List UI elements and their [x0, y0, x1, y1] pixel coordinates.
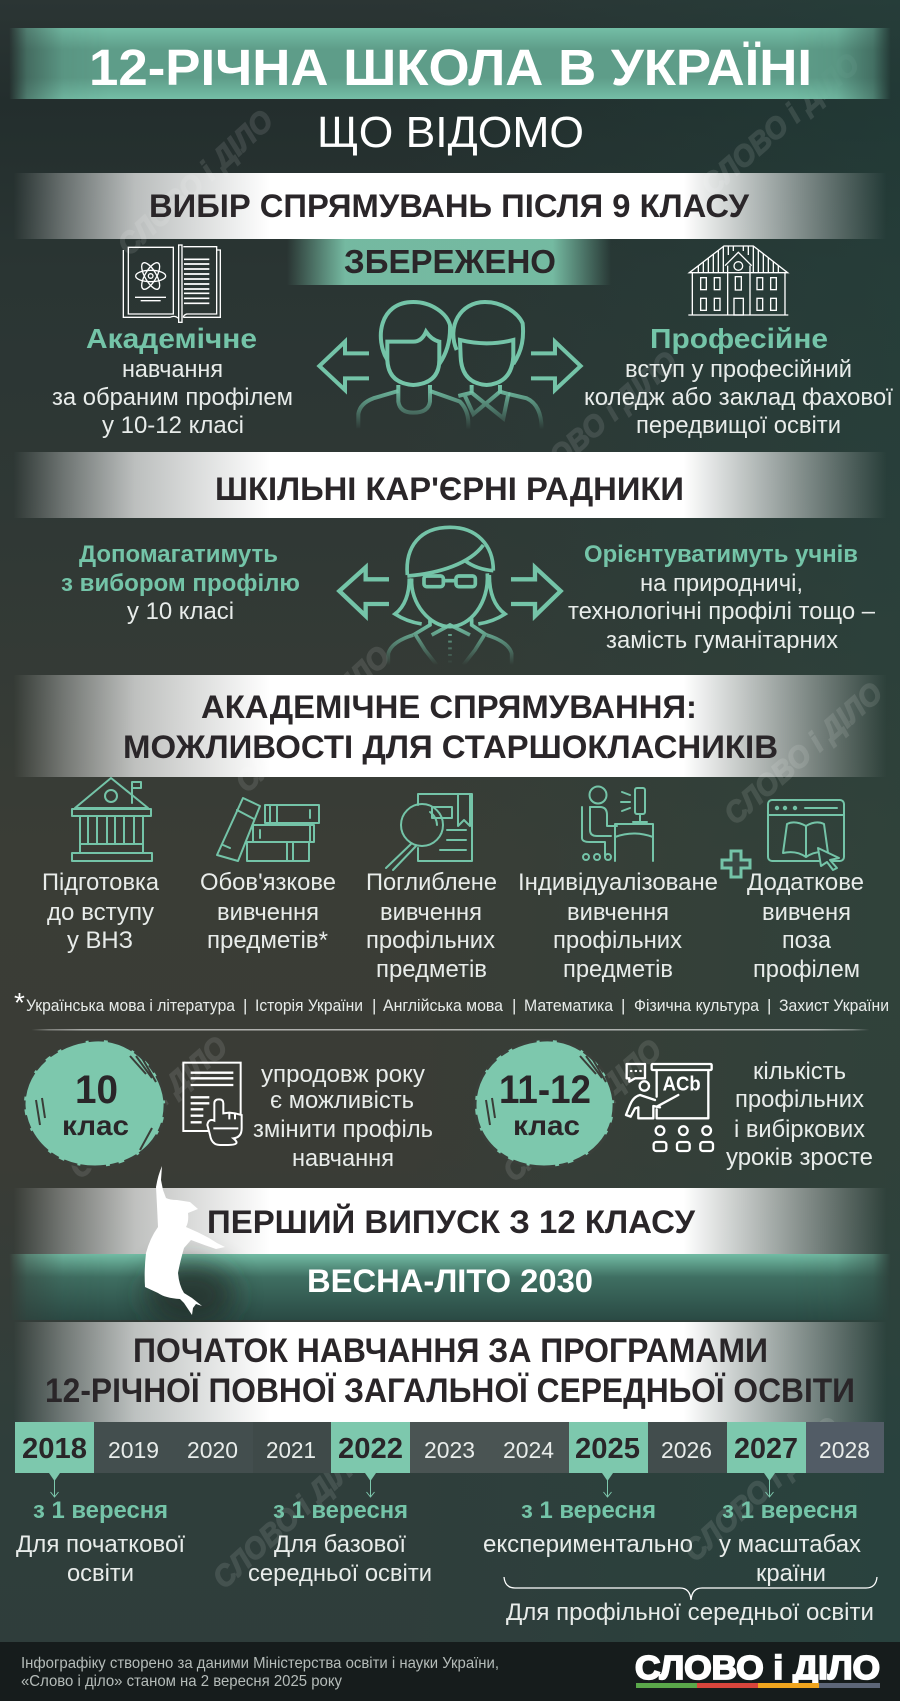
watermarks: СЛОВО і ДІЛО [207, 1438, 376, 1595]
opportunity: compulsory subjects: вивчення [217, 899, 319, 926]
milestone: experimental: з 1 вересня [521, 1497, 656, 1524]
watermarks: СЛОВО і ДІЛО [63, 1030, 234, 1185]
opportunity: extra study: поза [782, 927, 832, 954]
opportunity: university prep: у ВНЗ [67, 927, 133, 954]
subtitle: ЩО ВІДОМО [317, 108, 584, 157]
opportunity: individualised study: предметів [563, 956, 673, 983]
footnote: compulsory subjects list: Українська мова і література [26, 996, 235, 1015]
milestone: primary education [16, 1497, 185, 1587]
opportunity: individualised study: вивчення [567, 899, 669, 926]
timeline: 2019 [108, 1437, 159, 1463]
opportunity: compulsory subjects [200, 869, 336, 954]
icon: university building [72, 778, 152, 861]
icon: college building [688, 246, 788, 315]
logo: СЛОВО і ДІЛО [635, 1649, 880, 1686]
badge: grades 11-12: клас [513, 1110, 580, 1141]
text: adviser orientation: замість гуманітарних [606, 627, 838, 654]
milestone: basic secondary education: з 1 вересня [273, 1497, 408, 1524]
opportunity: in-depth study [366, 869, 497, 983]
opportunity: compulsory subjects: Обов'язкове [200, 869, 336, 896]
text: grade 10: упродовж року [261, 1061, 425, 1088]
section heading: academic direction opportunities [0, 675, 900, 777]
watermarks: СЛОВО і ДІЛО [718, 676, 889, 831]
timeline: 2021 [266, 1437, 316, 1463]
opportunity: individualised study [518, 869, 718, 983]
saved label [287, 239, 611, 285]
section heading: choice after grade 9 [0, 173, 900, 239]
brace [504, 1577, 877, 1600]
timeline: 2026 [661, 1437, 712, 1463]
section heading: first graduation: ПЕРШИЙ ВИПУСК З 12 КЛАСУ [207, 1204, 696, 1240]
opportunity: in-depth study: Поглиблене [366, 869, 497, 896]
date band: spring-summer 2030: ВЕСНА-ЛІТО 2030 [307, 1263, 593, 1299]
timeline: 2024 [503, 1437, 554, 1463]
panel: academic direction: Академічне [86, 323, 257, 354]
text: adviser help: у 10 класі [127, 598, 234, 625]
milestone: primary education: з 1 вересня [33, 1497, 168, 1524]
source note: Інфографіку створено за даними Міністерства освіти і науки України, [21, 1655, 499, 1672]
text: grade 10: змінити профіль [253, 1116, 433, 1143]
opportunity: university prep [42, 869, 160, 954]
opportunity: extra study: Додаткове [747, 869, 864, 896]
milestone: nationwide: з 1 вересня [722, 1497, 858, 1524]
timeline: 2020 [187, 1437, 238, 1463]
timeline [15, 1422, 884, 1473]
watermarks: СЛОВО і ДІЛО [497, 1033, 668, 1188]
text: grade 10: є можливість [270, 1087, 414, 1114]
milestone: nationwide: у масштабах [719, 1531, 861, 1558]
badge: grade 10 [24, 1040, 165, 1167]
footnote: compulsory subjects list: * [14, 987, 25, 1018]
text: grades 11-12 [726, 1058, 873, 1171]
section heading: academic direction opportunities: МОЖЛИВОСТІ ДЛЯ СТАРШОКЛАСНИКІВ [123, 729, 778, 765]
milestone: nationwide [719, 1497, 861, 1587]
milestone: experimental [483, 1497, 693, 1558]
milestone: primary education: освіти [67, 1560, 134, 1587]
timeline: 2018 [22, 1433, 87, 1465]
text: grades 11-12: і вибіркових [734, 1116, 865, 1143]
icon: online book in browser [768, 800, 844, 870]
section heading: career advisers: ШКІЛЬНІ КАР'ЄРНІ РАДНИКИ [215, 471, 684, 507]
milestone: primary education: Для початкової [16, 1531, 185, 1558]
footnote: compulsory subjects list: | [372, 996, 376, 1015]
footnote: compulsory subjects list: Математика [524, 996, 613, 1015]
watermarks: СЛОВО і ДІЛО [695, 47, 866, 202]
opportunity: extra study: вивченя [762, 899, 851, 926]
icon: magnifier over book [386, 794, 472, 870]
milestone: experimental: експериментально [483, 1531, 693, 1558]
opportunity: university prep: Підготовка [42, 869, 160, 896]
text: adviser orientation [568, 541, 876, 654]
text: adviser orientation: Орієнтуватимуть учнів [584, 541, 858, 568]
footnote: compulsory subjects list: Історія України [255, 996, 363, 1015]
footer [0, 1642, 900, 1701]
text: grades 11-12: профільних [735, 1086, 864, 1113]
text: adviser orientation: технологічні профілі тощо – [568, 598, 876, 625]
opportunity: individualised study: профільних [553, 927, 682, 954]
footnote: compulsory subjects list: | [243, 996, 247, 1015]
timeline: 2025 [575, 1433, 640, 1465]
saved label: ЗБЕРЕЖЕНО [344, 243, 556, 280]
milestone: nationwide: країни [756, 1560, 826, 1587]
text: profile secondary education: Для профільної середньої освіти [506, 1599, 874, 1626]
panel: professional direction: Професійне [650, 323, 828, 354]
opportunity: in-depth study: предметів [376, 956, 487, 983]
watermarks: СЛОВО і ДІЛО [111, 104, 280, 262]
opportunity: individualised study: Індивідуалізоване [518, 869, 718, 896]
opportunity: in-depth study: профільних [366, 927, 495, 954]
panel: professional direction: передвищої освіти [636, 412, 841, 439]
timeline: 2027 [734, 1433, 798, 1465]
icon: two students with arrows [319, 302, 581, 429]
footnote: compulsory subjects list: Англійська мова [383, 996, 504, 1015]
footnote: compulsory subjects list: | [512, 996, 516, 1015]
text: grade 10: навчання [292, 1145, 394, 1172]
text: grades 11-12: кількість [753, 1058, 846, 1085]
timeline: 2028 [819, 1437, 870, 1463]
panel: professional direction: коледж або заклад фахової [584, 384, 893, 411]
section heading: programme start: ПОЧАТОК НАВЧАННЯ ЗА ПРОГРАМАМИ [133, 1332, 768, 1370]
opportunity: extra study: профілем [753, 956, 860, 983]
icon: adviser with arrows [339, 527, 561, 665]
panel: professional direction [584, 323, 893, 439]
text: adviser help [61, 541, 300, 625]
icon: teacher at board: ACb [663, 1073, 701, 1096]
icon: student at desk [582, 786, 653, 861]
icon: plus [722, 851, 750, 877]
section heading: programme start [0, 1322, 900, 1422]
watermarks: СЛОВО і ДІЛО [678, 1411, 847, 1568]
section heading: first graduation [0, 1188, 900, 1254]
text: grade 10 [253, 1061, 433, 1172]
text: adviser orientation: на природничі, [640, 570, 803, 597]
section heading: academic direction opportunities: АКАДЕМІЧНЕ СПРЯМУВАННЯ: [201, 689, 697, 725]
watermarks: СЛОВО і ДІЛО [229, 640, 397, 799]
panel: academic direction: у 10-12 класі [102, 412, 244, 439]
watermarks: СЛОВО і ДІЛО [513, 345, 684, 500]
footnote: compulsory subjects list [14, 987, 889, 1018]
footnote: compulsory subjects list: Захист України [779, 996, 889, 1015]
icon: document and hand [183, 1063, 242, 1145]
badge: grade 10: 10 [75, 1068, 118, 1112]
milestone: basic secondary education: середньої освіти [248, 1560, 432, 1587]
footnote: compulsory subjects list: Фізична культура [634, 996, 759, 1015]
panel: academic direction: навчання [122, 356, 223, 383]
panel: academic direction [52, 323, 293, 439]
source note: «Слово і діло» станом на 2 вересня 2025 року [21, 1673, 342, 1690]
panel: academic direction: за обраним профілем [52, 384, 293, 411]
icon: teacher at board [626, 1064, 713, 1151]
badge: grades 11-12 [475, 1040, 614, 1167]
text: adviser help: Допомагатимуть [79, 541, 278, 568]
source note [21, 1655, 499, 1690]
text: grades 11-12: уроків зросте [726, 1144, 873, 1171]
section heading: career advisers [0, 452, 900, 518]
opportunity: extra study [747, 869, 864, 983]
icon: books [217, 798, 319, 861]
text: adviser help: з вибором профілю [61, 570, 300, 597]
section heading: programme start: 12-РІЧНОЇ ПОВНОЇ ЗАГАЛЬНОЇ СЕРЕДНЬОЇ ОСВІТИ [45, 1372, 855, 1410]
icon: jumping graduate [145, 1166, 225, 1315]
badge: grade 10: клас [62, 1110, 129, 1141]
panel: professional direction: вступ у професійний [625, 356, 852, 383]
footnote: compulsory subjects list: | [767, 996, 771, 1015]
badge: grades 11-12: 11-12 [499, 1068, 591, 1112]
milestone: basic secondary education [248, 1497, 432, 1587]
title: 12-РІЧНА ШКОЛА В УКРАЇНІ [89, 39, 812, 96]
timeline: 2022 [338, 1433, 403, 1465]
title block [0, 28, 900, 99]
section heading: choice after grade 9: ВИБІР СПРЯМУВАНЬ ПІСЛЯ 9 КЛАСУ [149, 188, 750, 224]
date band: spring-summer 2030 [0, 1254, 900, 1327]
opportunity: university prep: до вступу [47, 899, 154, 926]
footnote: compulsory subjects list: | [621, 996, 625, 1015]
milestone: basic secondary education: Для базової [274, 1531, 406, 1558]
icon: open book with atom [123, 245, 220, 322]
timeline: 2023 [424, 1437, 475, 1463]
opportunity: compulsory subjects: предметів* [207, 927, 328, 954]
opportunity: in-depth study: вивчення [380, 899, 482, 926]
timeline arrows [49, 1473, 775, 1497]
